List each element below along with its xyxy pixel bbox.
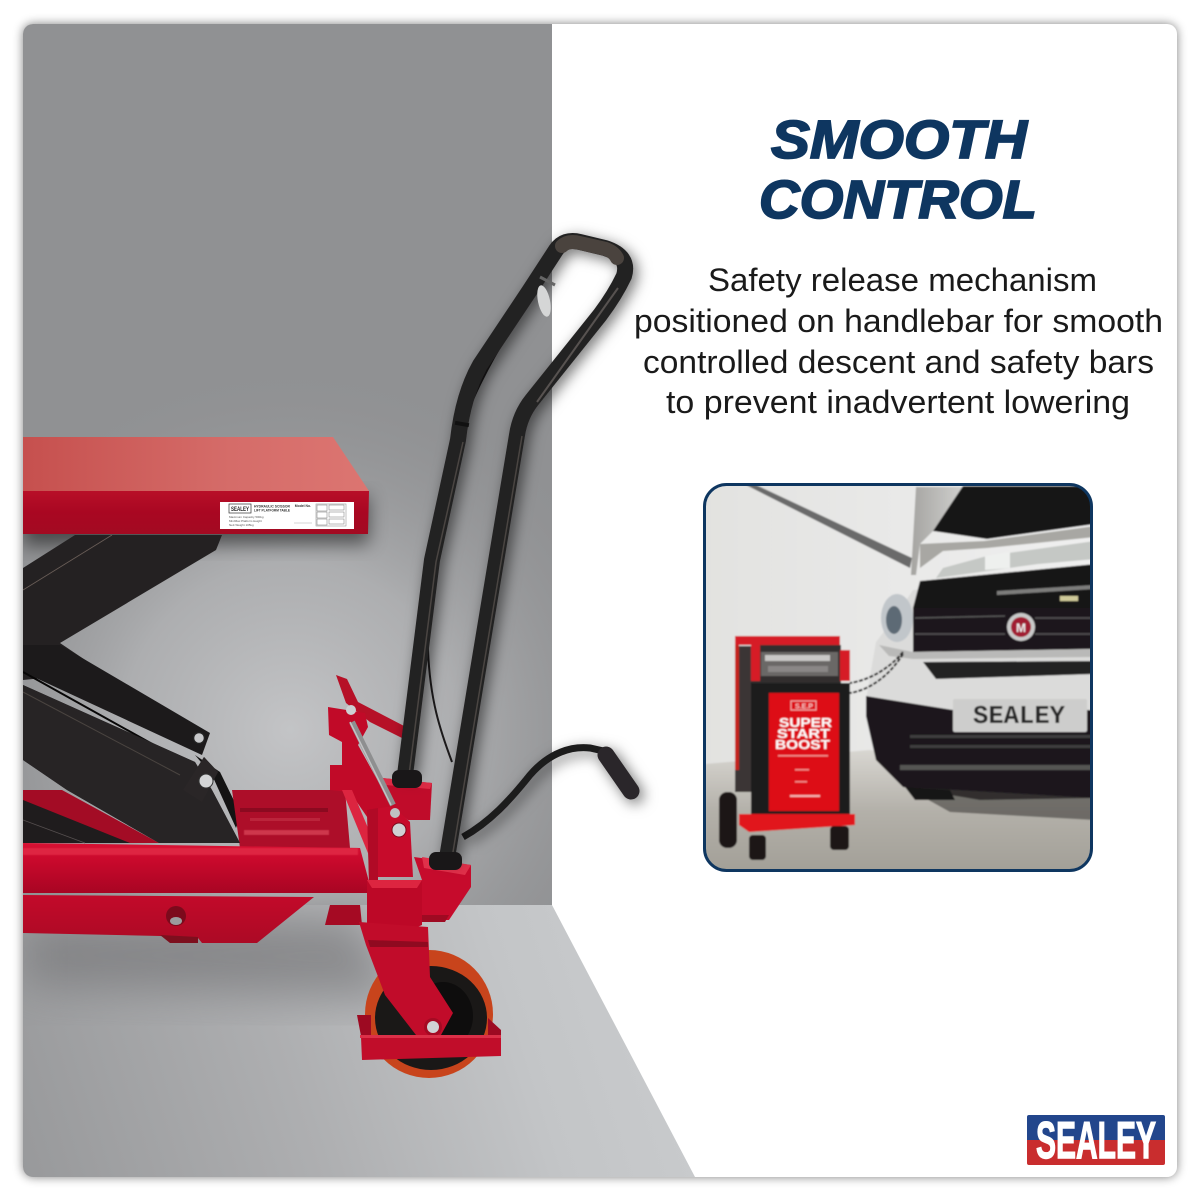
rear arm [23, 645, 210, 755]
number plate [953, 699, 1087, 732]
panel: product photo [23, 24, 695, 1177]
shadow below lift table [23, 915, 400, 1000]
hydraulic pump bracket [328, 675, 471, 932]
panel wording [775, 716, 832, 752]
platform top [23, 437, 369, 491]
van body [866, 486, 1095, 820]
pump post [367, 806, 413, 877]
unit top [751, 645, 841, 683]
upper arm [23, 535, 222, 680]
skirt hole [166, 906, 186, 926]
main arm [23, 685, 240, 843]
main arm overlay [23, 685, 240, 843]
panel wording: START [777, 727, 830, 741]
release clasp [535, 277, 555, 318]
rating label: LIFT PLATFORM TABLE [254, 508, 290, 512]
foot guard tray [357, 1015, 501, 1060]
control panel [761, 652, 838, 676]
engine bay [913, 564, 1095, 608]
lower arm [23, 800, 130, 843]
handle frame [405, 241, 625, 858]
unit body [751, 683, 850, 818]
lift table platform [23, 437, 369, 546]
badge [1007, 613, 1035, 641]
crossbar [342, 790, 368, 854]
rating label: Maximum Capacity 500kg [229, 515, 264, 519]
ceiling beam [744, 484, 912, 568]
panel wording: SUPER [779, 716, 832, 730]
wheel [365, 950, 493, 1078]
rating label: HYDRAULIC SCISSOR [254, 504, 291, 508]
front beam [23, 843, 372, 893]
description text: controlled descent and safety bars [643, 344, 1154, 380]
white body [866, 575, 1095, 712]
van body: M [1016, 621, 1026, 635]
inset border [704, 484, 1092, 870]
red base [739, 814, 855, 832]
upper post [328, 707, 390, 818]
garage floor [705, 750, 1095, 872]
cable tie [455, 421, 469, 427]
description text: to prevent inadvertent lowering [666, 384, 1130, 420]
floor backdrop [23, 905, 695, 1177]
rating label [220, 502, 354, 529]
jump leads [850, 652, 903, 693]
red front panel [769, 693, 839, 811]
title [759, 110, 1037, 230]
handle foot caps [392, 770, 462, 870]
number plate: SEALEY [973, 701, 1065, 731]
release pedal [336, 675, 406, 738]
side block [414, 857, 471, 920]
rating label: Nett Weight 105kg [229, 523, 254, 527]
title: CONTROL [759, 170, 1037, 230]
starter unit: S.E.P [795, 704, 813, 710]
chrome bar [879, 645, 1095, 659]
van hood [911, 487, 963, 575]
headlight [881, 594, 913, 642]
rating label: Model No. [295, 504, 311, 508]
upper grille [913, 608, 1095, 652]
wall backdrop [23, 24, 552, 906]
base frame [23, 685, 372, 943]
wheels [719, 792, 849, 860]
pump rod [352, 722, 393, 805]
windscreen [936, 541, 1095, 578]
rating label: Min/Max Platform Height [229, 519, 262, 523]
van shadow on floor [905, 787, 1095, 820]
panel wording: BOOST [775, 738, 830, 752]
description text: positioned on handlebar for smooth [634, 303, 1163, 339]
lower skirt [23, 895, 314, 943]
description text: Safety release mechanism [708, 262, 1097, 298]
scissor arms [23, 535, 241, 843]
lower grille [923, 661, 1095, 679]
handle grip [562, 242, 617, 258]
description text [634, 262, 1163, 420]
rear channel [232, 790, 350, 848]
collar [367, 880, 422, 932]
unit side [735, 646, 751, 792]
rating label: SEALEY [231, 506, 249, 513]
caster fork [359, 922, 453, 1036]
tube highlights [409, 288, 618, 858]
title: SMOOTH [771, 110, 1028, 170]
arm bolts [194, 732, 213, 788]
rear block [382, 778, 432, 820]
panel: inset photo of starter and van [704, 484, 1095, 872]
bumper [866, 696, 1095, 800]
hydraulic lever [463, 748, 631, 837]
cable [428, 351, 499, 762]
starter unit [719, 636, 855, 860]
platform front [23, 491, 369, 534]
garage wall [705, 485, 1091, 770]
